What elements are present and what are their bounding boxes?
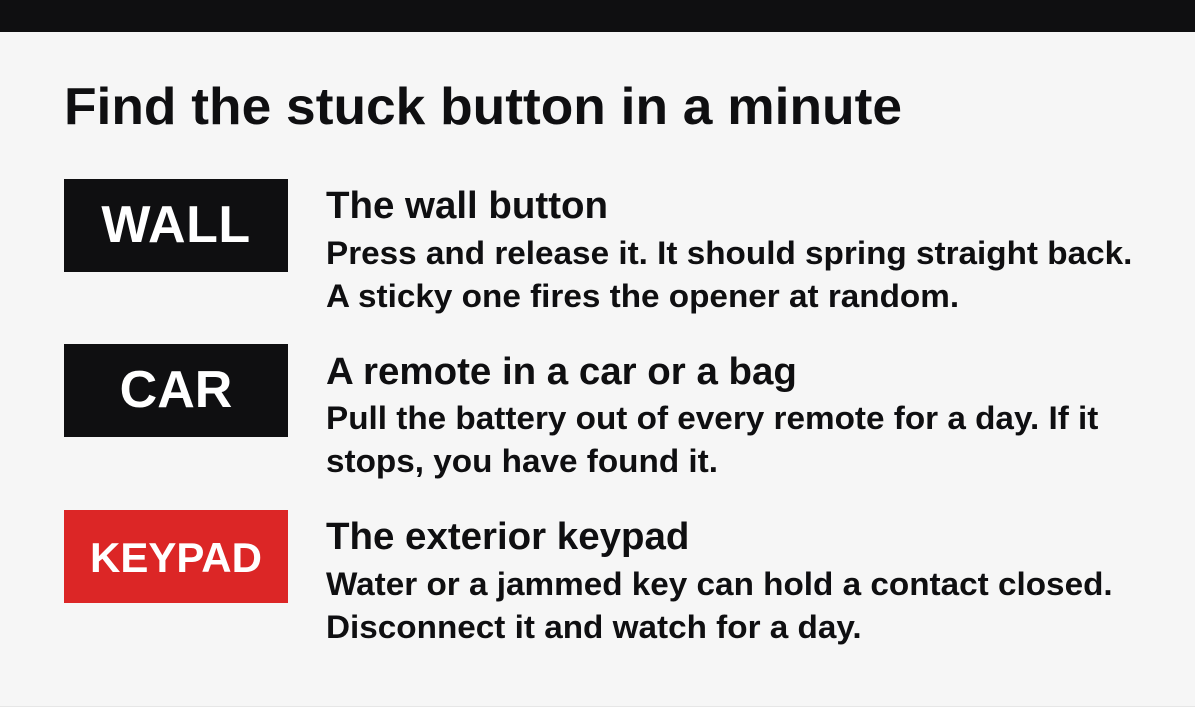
- row: exterior keypad: [64, 510, 1113, 645]
- text: keypad instructions: Water or a jammed key can hold a contact closed.: [326, 566, 1113, 602]
- text: remote instructions: Pull the battery out of every remote for a day. If it: [326, 400, 1098, 436]
- tag: CAR: [64, 344, 288, 437]
- text: remote instructions: stops, you have found it.: [326, 443, 718, 479]
- heading: the wall button: The wall button: [326, 185, 608, 227]
- tag: WALL: [64, 179, 288, 272]
- text: wall button instructions: [326, 235, 1132, 314]
- top bar: [0, 0, 1195, 32]
- row: car remote: [64, 344, 1098, 479]
- text: remote instructions: [326, 400, 1098, 479]
- text: wall button instructions: Press and release it. It should spring straight back.: [326, 235, 1132, 271]
- text: keypad instructions: [326, 566, 1113, 645]
- tag: KEYPAD: KEYPAD: [90, 534, 262, 581]
- heading: remote in a car or bag: A remote in a car or a bag: [326, 351, 797, 393]
- tag: WALL: WALL: [101, 196, 251, 254]
- row: wall button: [64, 179, 1132, 314]
- heading: the exterior keypad: The exterior keypad: [326, 516, 689, 558]
- text: wall button instructions: A sticky one fires the opener at random.: [326, 278, 959, 314]
- tag: CAR: CAR: [120, 361, 232, 419]
- title: Find the stuck button in a minute: [64, 78, 902, 136]
- text: keypad instructions: Disconnect it and watch for a day.: [326, 609, 862, 645]
- tag: KEYPAD: [64, 510, 288, 603]
